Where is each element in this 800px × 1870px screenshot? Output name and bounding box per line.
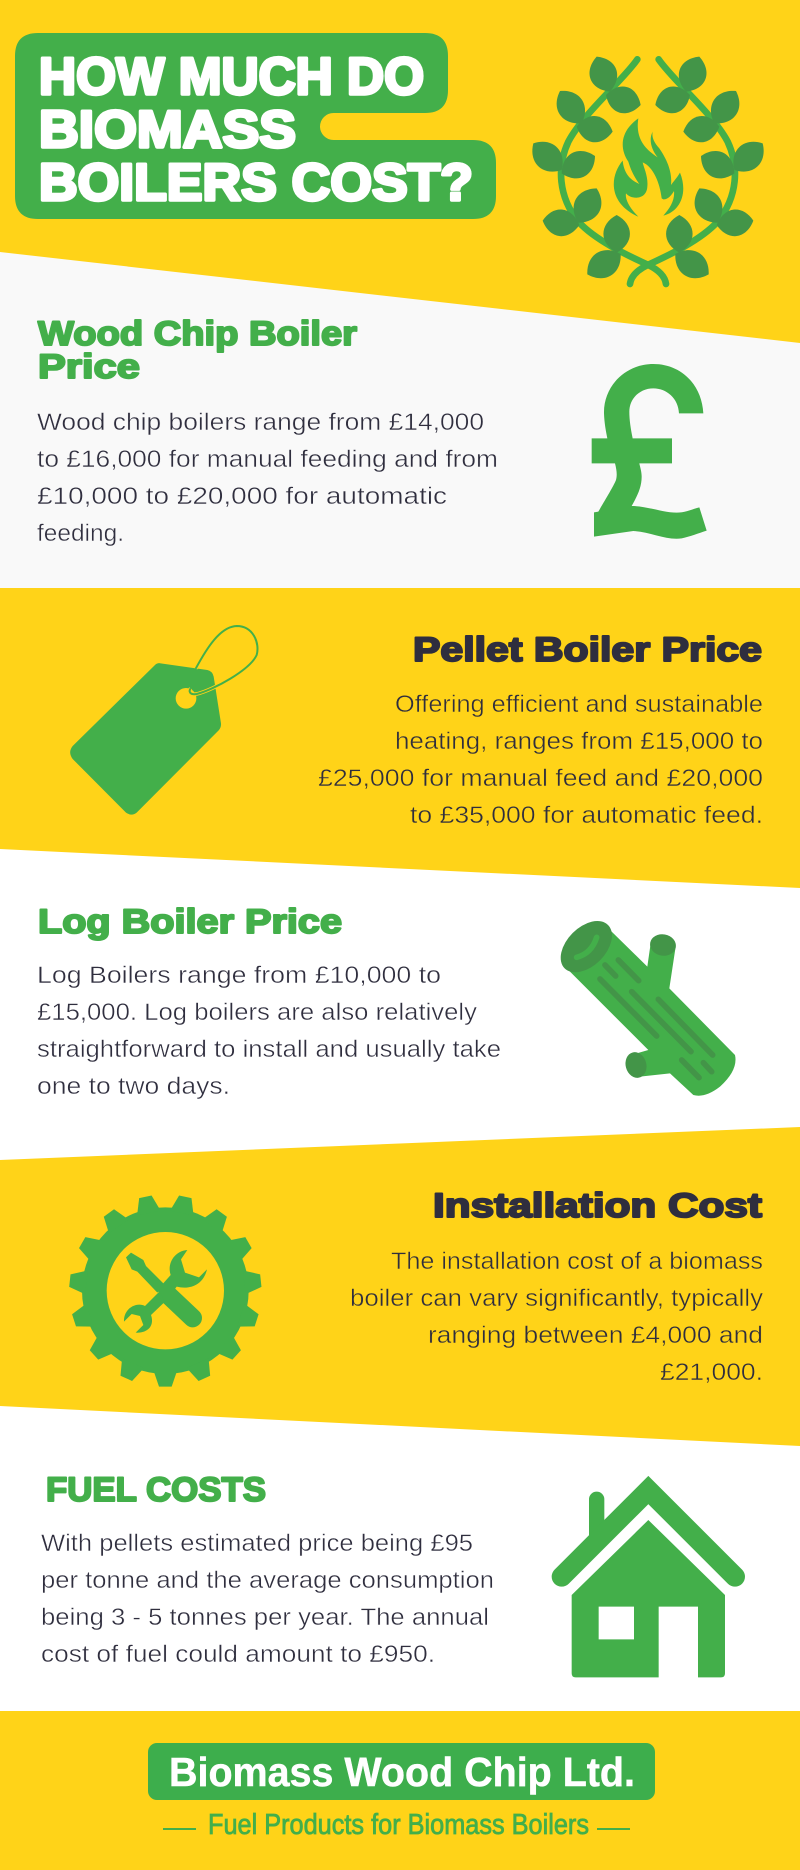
text: installation body: The installation cost of a biomass [391,1248,763,1275]
text: log boiler body: Log Boilers range from £10,000 to [37,962,441,989]
heading: pellet boiler price: Pellet Boiler Price [413,631,762,669]
heading: wood chip boiler price: Price [38,348,140,386]
section: fuel costs [41,1471,735,1677]
text: wood chip body: Wood chip boilers range from £14,000 [37,409,484,436]
text: log boiler body: one to two days. [37,1073,230,1100]
title: BOILERS COST? [39,154,473,212]
section: log boiler price [37,903,736,1100]
text: installation body: ranging between £4,000 and [428,1322,763,1349]
text: pellet body: to £35,000 for automatic feed. [410,802,763,829]
icon: log [551,911,736,1096]
icon: house [562,1490,735,1677]
text: pellet body: Offering efficient and sustainable [395,691,763,718]
text: fuel costs body: per tonne and the average consumption [41,1567,494,1594]
icon: pound sign [592,364,707,539]
footer logo: Biomass Wood Chip Ltd. [169,1749,635,1795]
footer logo: Fuel Products for Biomass Boilers [208,1809,589,1841]
text: log boiler body [37,962,501,1100]
icon: wreath with flame [532,57,764,284]
panel: wood chip background [0,252,800,588]
text: fuel costs body [41,1530,494,1668]
text: wood chip body: to £16,000 for manual feeding and from [37,446,498,473]
text: log boiler body: £15,000. Log boilers are also relatively [37,999,478,1026]
heading: fuel costs: FUEL COSTS [46,1471,266,1509]
text: fuel costs body: being 3 - 5 tonnes per year. The annual [41,1604,489,1631]
title [15,33,496,219]
heading: wood chip boiler price: Wood Chip Boiler [38,315,357,353]
section: installation cost [69,1187,764,1387]
text: pellet body: heating, ranges from £15,000 to [395,728,763,755]
footer logo [148,1743,655,1841]
title: BIOMASS [39,101,296,159]
text: installation body: boiler can vary significantly, typically [350,1285,764,1312]
text: wood chip body: £10,000 to £20,000 for automatic [37,483,447,510]
text: pellet body: £25,000 for manual feed and £20,000 [318,765,763,792]
text: pellet body [318,691,763,829]
icon: gear with tools [69,1194,262,1387]
text: log boiler body: straightforward to install and usually take [37,1036,501,1063]
text: wood chip body: feeding. [37,520,124,547]
text: fuel costs body: With pellets estimated price being £95 [41,1530,473,1557]
icon: price tag [70,626,257,815]
heading: wood chip boiler price [38,315,357,386]
section: pellet boiler price [70,626,763,829]
title: HOW MUCH DO [39,48,424,106]
text: installation body [350,1248,764,1386]
heading: installation cost: Installation Cost [433,1187,762,1225]
heading: log boiler price: Log Boiler Price [38,903,342,941]
panel: fuel costs background [0,1406,800,1711]
panel: log boiler background [0,849,800,1160]
text: installation body: £21,000. [660,1359,763,1386]
text: fuel costs body: cost of fuel could amount to £950. [41,1641,435,1668]
text: wood chip body [37,409,498,547]
section: wood chip boiler price [37,315,707,547]
